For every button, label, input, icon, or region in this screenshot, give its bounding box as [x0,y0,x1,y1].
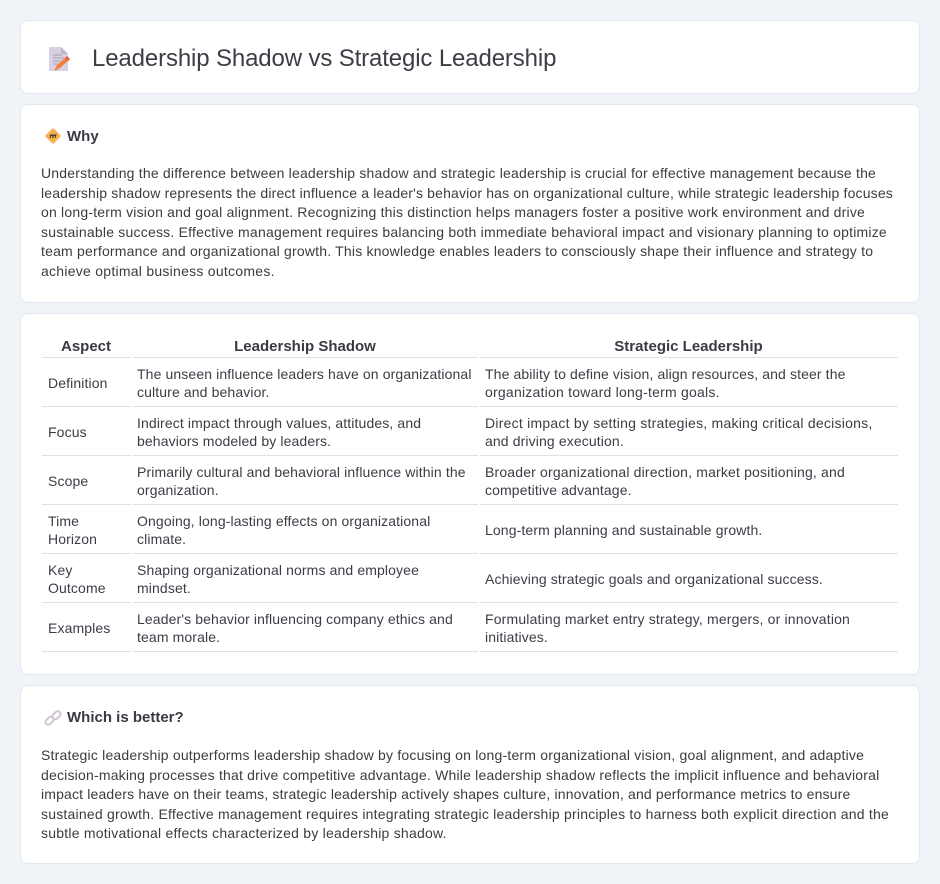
cell: key outcome strategic: Achieving strategic goals and organizational success. [485,571,823,587]
row: focus: Focus [48,424,87,440]
cell: time horizon strategic: Long-term planning and sustainable growth. [485,522,762,538]
cell: examples shadow: Leader's behavior influencing company ethics and [137,611,453,627]
cell: key outcome shadow: mindset. [137,580,191,596]
cell: focus shadow: Indirect impact through values, attitudes, and [137,415,421,431]
panel: which is better [20,685,920,864]
text block: why paragraph [41,165,893,279]
row: key outcome: Outcome [48,580,106,596]
cell: focus strategic: and driving execution. [485,433,624,449]
icon: diamond sign [45,128,61,144]
text block: which is better paragraph: sustained growth. Effective management requires integrating strategic leadership principles to harness both explicit direction and the [41,806,889,822]
heading: which is better: Which is better? [67,709,184,726]
cell: key outcome shadow [137,562,419,596]
cell: examples strategic: initiatives. [485,629,548,645]
panel: why [20,104,920,303]
cell: definition shadow [137,366,472,400]
text block: why paragraph: team performance and organizational growth. This knowledge enables leaders to consciously shape their influence and strategy to [41,243,873,259]
row: examples: Examples [48,620,110,636]
row: key outcome [48,562,106,596]
table header: leadership shadow: Leadership Shadow [234,338,376,355]
cell: focus shadow: behaviors modeled by leaders. [137,433,331,449]
text block: why paragraph: sustainable success. Effective management requires balancing both immediate behavioral impact and visionary planning to optimize [41,224,887,240]
text block: why paragraph: achieve optimal business outcomes. [41,263,275,279]
cell: focus strategic: Direct impact by setting strategies, making critical decisions, [485,415,872,431]
row: time horizon [48,513,97,547]
table header: aspect: Aspect [61,338,111,355]
title: Leadership Shadow vs Strategic Leadership [92,45,556,72]
cell: examples strategic: Formulating market entry strategy, mergers, or innovation [485,611,850,627]
heading: why: Why [67,128,99,145]
cell: definition strategic [485,366,846,400]
text block: which is better paragraph: subtle motivational effects characterized by leadership shadow. [41,825,447,841]
cell: definition strategic: organization toward long-term goals. [485,384,720,400]
cell: scope shadow: organization. [137,482,219,498]
cell: examples shadow [137,611,453,645]
cell: examples strategic [485,611,850,645]
cell: scope strategic: Broader organizational direction, market positioning, and [485,464,845,480]
text block: which is better paragraph: decision-making processes that drive competitive advantage. While leadership shadow reflects the implicit influence and behavioral [41,767,879,783]
panel: title header [20,20,920,94]
cell: key outcome shadow: Shaping organizational norms and employee [137,562,419,578]
row: key outcome: Key [48,562,72,578]
cell: time horizon shadow: climate. [137,531,186,547]
row: scope: Scope [48,473,88,489]
row: time horizon: Time [48,513,79,529]
icon: chain link [44,710,62,726]
text block: why paragraph: on long-term vision and goal alignment. Recognizing this distinction helps managers foster a positive work environment and drive [41,204,865,220]
cell: focus shadow [137,415,421,449]
text block: which is better paragraph: impact leaders have on their teams, strategic leadership actively shapes culture, innovation, and performance metrics to ensure [41,786,850,802]
row: time horizon: Horizon [48,531,97,547]
cell: time horizon shadow: Ongoing, long-lasting effects on organizational [137,513,430,529]
cell: examples shadow: team morale. [137,629,220,645]
cell: scope shadow: Primarily cultural and behavioral influence within the [137,464,466,480]
cell: definition shadow: The unseen influence leaders have on organizational [137,366,472,382]
text block: which is better paragraph [41,747,889,841]
panel: comparison table [20,313,920,675]
table header: strategic leadership: Strategic Leadership [614,338,763,355]
cell: definition shadow: culture and behavior. [137,384,270,400]
cell: definition strategic: The ability to define vision, align resources, and steer the [485,366,846,382]
cell: focus strategic [485,415,872,449]
cell: time horizon shadow [137,513,430,547]
icon: document with pencil [49,47,70,71]
text block: why paragraph: leadership shadow represents the direct influence a leader's behavior has on organizational culture, while strategic leadership focuses [41,185,893,201]
cell: scope shadow [137,464,466,498]
row: definition: Definition [48,375,108,391]
cell: scope strategic [485,464,845,498]
text block: which is better paragraph: Strategic leadership outperforms leadership shadow by focusing on long-term organizational vision, goal alignment, and adaptive [41,747,864,763]
cell: scope strategic: competitive advantage. [485,482,632,498]
text block: why paragraph: Understanding the difference between leadership shadow and strategic leadership is crucial for effective management because the [41,165,876,181]
